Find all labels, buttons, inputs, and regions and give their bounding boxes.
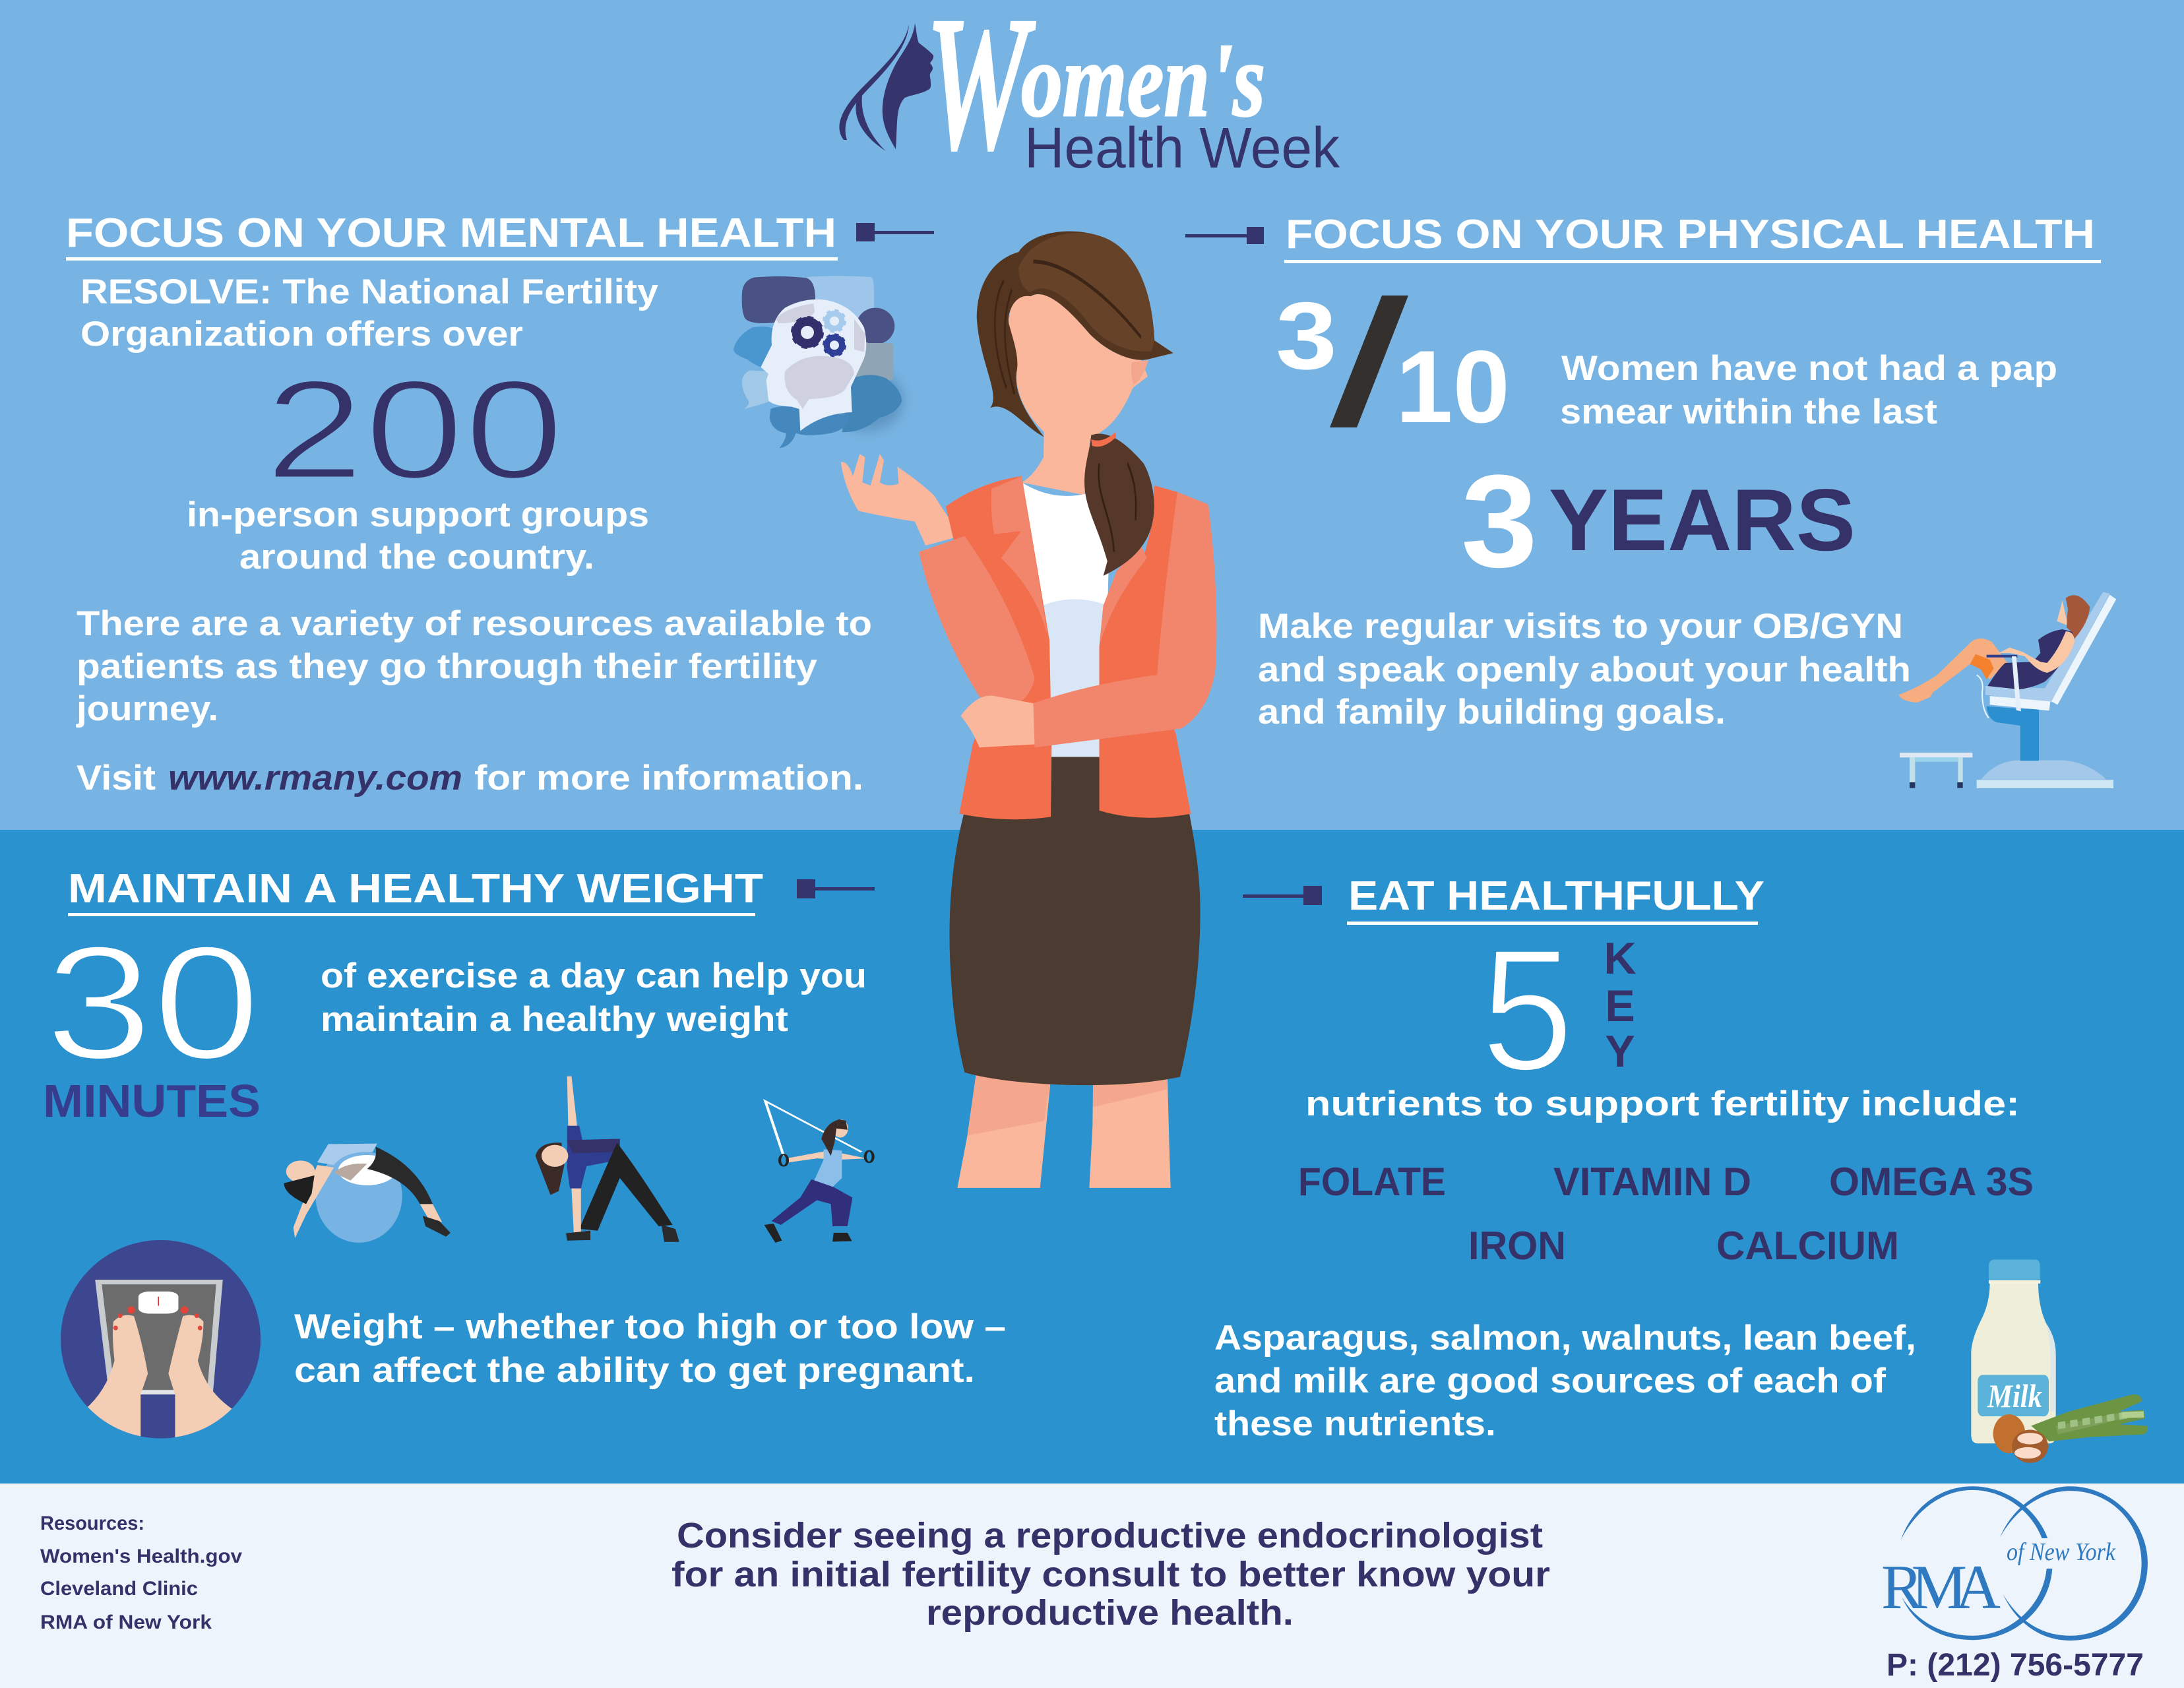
- callout: see a reproductive endocrinologist: for an initial fertility consult to better know your: [671, 1555, 1550, 1594]
- legs: [957, 1069, 1171, 1188]
- stat: 5 key: K: [1604, 933, 1637, 984]
- panel: eat healthfully: [1214, 873, 2148, 1463]
- stat: 3 out of 10: [1276, 282, 1510, 445]
- label: Milk: Milk: [1987, 1377, 2042, 1414]
- text: resources paragraph: [76, 604, 872, 728]
- hair strands: [995, 262, 1141, 394]
- stat: 30 minutes: MINUTES: [43, 1075, 261, 1127]
- stat: 5 key: E: [1605, 981, 1635, 1031]
- panel: healthy weight: [43, 866, 1006, 1441]
- text: resources list: Resources:: [40, 1513, 144, 1534]
- text: resources paragraph: journey.: [76, 689, 218, 728]
- icon: woman profile silhouette: [839, 23, 933, 151]
- text: regular visits: and speak openly about your health: [1258, 650, 1911, 689]
- heading: maintain a healthy weight: MAINTAIN A HEALTHY WEIGHT: [68, 866, 763, 912]
- text: food sources: these nutrients.: [1214, 1404, 1496, 1443]
- text: regular visits: Make regular visits to your OB/GYN: [1258, 607, 1903, 646]
- text: RESOLVE intro: Organization offers over: [80, 315, 523, 354]
- text: support groups: in-person support groups: [187, 495, 649, 534]
- icon: dark gear: [792, 317, 823, 348]
- icon: woman on exercise ball: [284, 1144, 451, 1243]
- callout: see a reproductive endocrinologist: [671, 1516, 1550, 1633]
- text: resources list: RMA of New York: [40, 1611, 212, 1633]
- text: resources list: Women's Health.gov: [40, 1546, 242, 1567]
- raised hand: [841, 454, 960, 546]
- text: RESOLVE intro: RESOLVE: The National Fertility: [80, 272, 659, 311]
- stat: 3 years: 3: [1461, 448, 1538, 595]
- hand on arm: [960, 695, 1036, 747]
- text: food sources: and milk are good sources of each of: [1214, 1361, 1886, 1400]
- title word: Women's: omen's: [1021, 21, 1265, 139]
- text: resources paragraph: patients as they go through their fertility: [77, 647, 818, 686]
- list: nutrients: CALCIUM: [1716, 1224, 1899, 1268]
- icon: exercise figures and scale: [61, 1077, 873, 1441]
- text: website line: www.rmany.com: [168, 759, 462, 797]
- title: Women's Health Week logo: [839, 0, 1340, 187]
- icon: milk bottle, walnut and asparagus: [1971, 1259, 2148, 1463]
- skirt: [949, 754, 1201, 1085]
- face: [1009, 294, 1148, 441]
- background: footer band: [0, 1484, 2184, 1688]
- list: nutrients: IRON: [1468, 1224, 1566, 1268]
- illustration: central woman figure: [841, 232, 1216, 1188]
- stat: 3 out of 10: 3: [1276, 282, 1337, 389]
- callout: see a reproductive endocrinologist: Consider seeing a reproductive endocrinologist: [677, 1516, 1543, 1555]
- text: regular visits: and family building goals.: [1258, 693, 1726, 732]
- list: nutrients: [1298, 1160, 2034, 1268]
- text: regular visits: [1258, 607, 1911, 732]
- text: resources list: [40, 1513, 242, 1633]
- heading: maintain a healthy weight: [68, 866, 875, 916]
- text: website line: Visit: [77, 759, 156, 797]
- text: exercise: [321, 956, 867, 1039]
- text: pap smear: smear within the last: [1560, 392, 1937, 431]
- hair band: [1091, 432, 1116, 447]
- logo: RMA of New York: of New York: [2007, 1538, 2116, 1566]
- text: website line: [77, 759, 863, 797]
- panel: mental health: [66, 210, 934, 797]
- hair: [977, 232, 1173, 437]
- stat: 200: 200: [265, 351, 564, 509]
- lapels: [991, 476, 1147, 646]
- icon: woman with resistance band: [764, 1101, 873, 1243]
- heading: eat healthfully: [1243, 873, 1764, 925]
- title line: Health Week: Health Week: [1024, 116, 1340, 180]
- icon: feet on weighing scale: [61, 1240, 261, 1441]
- heading: focus on your mental health: FOCUS ON YOUR MENTAL HEALTH: [66, 210, 836, 256]
- text: support groups: around the country.: [239, 538, 594, 577]
- stat: 3 years: [1461, 448, 1856, 595]
- sleeve left: [919, 536, 1035, 703]
- text: pap smear: [1560, 349, 2057, 431]
- text: exercise: maintain a healthy weight: [321, 1000, 788, 1039]
- stat: 5 key: Y: [1605, 1026, 1635, 1077]
- stat: 5 key: 5: [1481, 912, 1574, 1107]
- icon: head with gears and speech bubbles: [733, 276, 904, 448]
- heading: focus on your physical health: FOCUS ON YOUR PHYSICAL HEALTH: [1286, 212, 2095, 257]
- text: weight effect: [294, 1307, 1006, 1390]
- stat: 30 minutes: 30: [45, 912, 261, 1094]
- panel: physical health: [1185, 212, 2116, 788]
- text: support groups: [187, 495, 649, 577]
- neck: [1022, 425, 1091, 495]
- stat: 3 out of 10: 10: [1396, 330, 1510, 445]
- text: resources paragraph: There are a variety of resources available to: [77, 604, 872, 643]
- callout: see a reproductive endocrinologist: reproductive health.: [926, 1593, 1294, 1633]
- background: middle blue band: [0, 830, 2184, 1484]
- background: top light blue band: [0, 0, 2184, 830]
- icon: woman doing triangle pose: [536, 1077, 679, 1242]
- hair highlight: [1018, 233, 1154, 352]
- list: nutrients: VITAMIN D: [1553, 1160, 1751, 1204]
- stat: 5 key: [1481, 912, 1637, 1107]
- text: RESOLVE intro: [80, 272, 659, 354]
- jacket right: [1100, 485, 1191, 818]
- stat: 3 years: YEARS: [1549, 472, 1856, 569]
- text: resources list: Cleveland Clinic: [40, 1578, 198, 1600]
- white shirt: [1016, 480, 1109, 653]
- logo: RMA of New York: RMA: [1881, 1552, 2001, 1622]
- text: weight effect: Weight – whether too high or too low –: [294, 1307, 1006, 1346]
- text: food sources: Asparagus, salmon, walnuts, lean beef,: [1214, 1319, 1916, 1358]
- text: exercise: of exercise a day can help you: [321, 956, 867, 995]
- sleeve right: [1034, 492, 1216, 747]
- text: nutrients intro: nutrients to support fertility include:: [1305, 1084, 2020, 1123]
- jacket left: [946, 476, 1051, 819]
- shirt shade: [1043, 599, 1108, 757]
- text: food sources: [1214, 1319, 1916, 1443]
- text: phone number: P: (212) 756-5777: [1887, 1648, 2144, 1683]
- panel: footer: [40, 1486, 2148, 1683]
- text: weight effect: can affect the ability to get pregnant.: [294, 1351, 975, 1390]
- icon: light gear: [824, 311, 845, 332]
- ponytail strands: [1099, 464, 1136, 552]
- logo: RMA of New York: [1881, 1486, 2148, 1641]
- ponytail: [1084, 433, 1154, 576]
- text: pap smear: Women have not had a pap: [1561, 349, 2057, 388]
- list: nutrients: OMEGA 3S: [1829, 1160, 2034, 1204]
- icon: woman in examination chair: [1898, 592, 2116, 788]
- heading: eat healthfully: EAT HEALTHFULLY: [1348, 873, 1764, 919]
- list: nutrients: FOLATE: [1298, 1160, 1446, 1204]
- ear: [1131, 360, 1148, 385]
- icon: blue gear: [824, 334, 845, 356]
- text: website line: for more information.: [474, 759, 863, 797]
